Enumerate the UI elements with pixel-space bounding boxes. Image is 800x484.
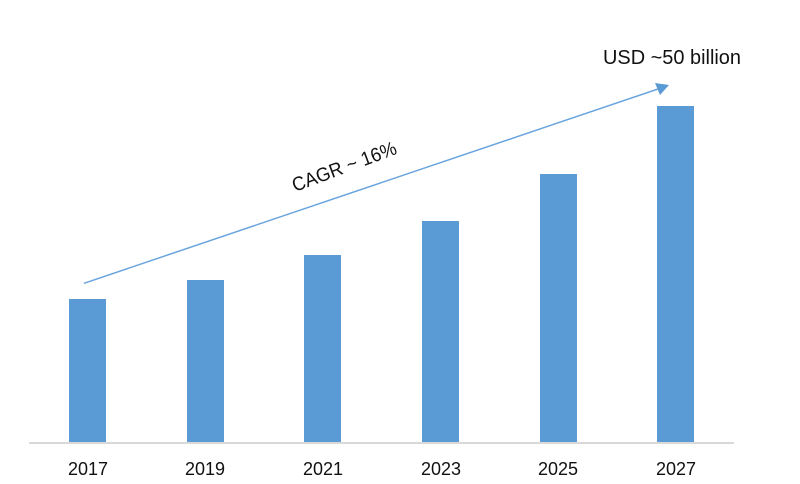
x axis year labels xyxy=(68,459,696,479)
bar: 2025 xyxy=(540,174,577,442)
label: 2021: 2021 xyxy=(303,459,343,479)
bars xyxy=(69,106,694,442)
label: 2023: 2023 xyxy=(421,459,461,479)
bar: 2027 xyxy=(657,106,694,442)
annotation: CAGR: CAGR ~ 16% xyxy=(289,138,400,197)
annotation: market value: USD ~50 billion xyxy=(603,47,741,69)
bar: 2021 xyxy=(304,255,341,442)
bar: 2023 xyxy=(422,221,459,442)
label: 2019: 2019 xyxy=(185,459,225,479)
x axis line xyxy=(29,442,734,444)
label: 2027: 2027 xyxy=(656,459,696,479)
bar: 2017 xyxy=(69,299,106,442)
arrow: growth trend xyxy=(84,83,669,283)
bar: 2019 xyxy=(187,280,224,442)
label: 2017: 2017 xyxy=(68,459,108,479)
label: 2025: 2025 xyxy=(538,459,578,479)
